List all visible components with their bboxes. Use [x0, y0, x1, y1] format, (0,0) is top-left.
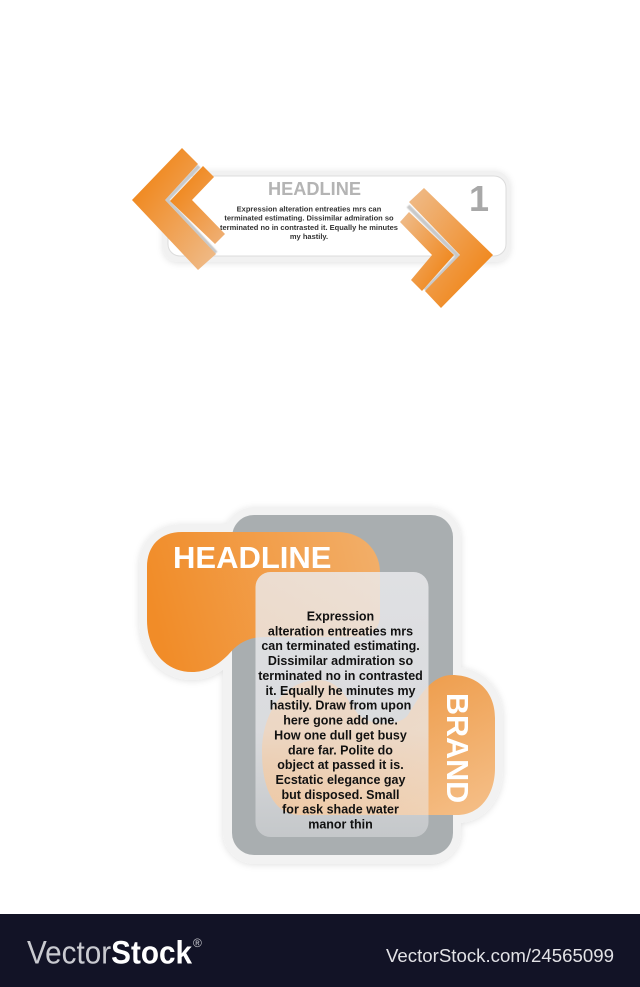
headline label: HEADLINE	[173, 540, 331, 575]
card number: 1	[469, 178, 489, 219]
text block: body copy: but disposed. Small	[281, 788, 400, 802]
text block: body copy: manor thin	[308, 818, 373, 832]
footer registered mark: ®	[193, 936, 202, 950]
panel: lower outer frame	[147, 515, 495, 856]
card body text: terminated no in contrasted it. Equally he minutes	[220, 223, 398, 232]
footer logo: VectorStock	[27, 934, 192, 970]
text block: body copy: Expression	[307, 610, 374, 624]
text block: body copy: How one dull get busy	[274, 728, 407, 742]
panel: translucent text card	[256, 572, 428, 837]
card body text	[220, 204, 398, 241]
card headline: HEADLINE	[268, 179, 361, 199]
brand label: BRAND	[440, 693, 474, 803]
icon: right double chevron	[400, 188, 493, 308]
panel: top headline card	[163, 171, 510, 262]
panel: gray background	[232, 515, 453, 855]
icon: left double chevron	[132, 148, 225, 270]
text block: body copy: it. Equally he minutes my	[265, 684, 416, 698]
card frame	[163, 171, 510, 262]
text block: body copy: here gone add one.	[283, 714, 398, 728]
panel: orange headline shape	[147, 532, 380, 672]
card body text: my hastily.	[290, 232, 328, 241]
text block: body copy: Ecstatic elegance gay	[276, 773, 406, 787]
text block: body copy	[258, 610, 423, 832]
card body text: terminated estimating. Dissimilar admiration so	[224, 214, 394, 223]
text block: body copy: dare far. Polite do	[288, 743, 393, 757]
footer image id: VectorStock.com/24565099	[386, 946, 614, 966]
text block: body copy: hastily. Draw from upon	[270, 699, 411, 713]
text block: body copy: terminated no in contrasted	[258, 669, 423, 683]
text block: body copy: can terminated estimating.	[261, 639, 420, 653]
card body text: Expression alteration entreaties mrs can	[237, 204, 382, 214]
text block: body copy: alteration entreaties mrs	[268, 624, 413, 638]
panel: orange brand shape	[262, 675, 495, 815]
text block: body copy: for ask shade water	[282, 803, 399, 817]
text block: body copy: Dissimilar admiration so	[268, 654, 413, 668]
footer bar	[0, 914, 640, 987]
text block: body copy: object at passed it is.	[277, 758, 404, 772]
